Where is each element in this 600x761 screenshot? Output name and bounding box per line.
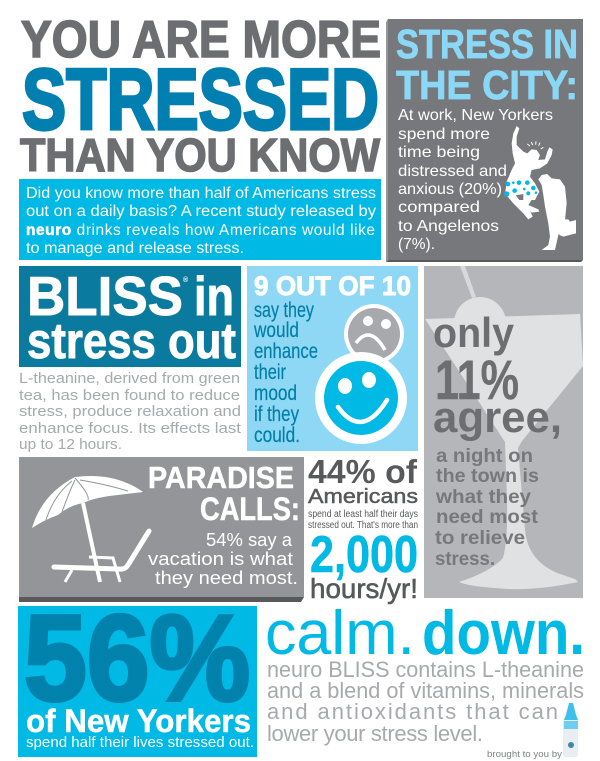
text: vacation (148, 530, 298, 588)
text: 44 percent of americans: 2,000 (310, 526, 418, 584)
panel: intro: Did you know more than half of Americans stress (26, 185, 376, 202)
heading: 9 out of 10: 9 OUT OF 10 (254, 271, 411, 301)
text: only 11% agree (433, 309, 562, 442)
text: city body: distressed and (398, 163, 507, 180)
text: city body: anxious (20%) (398, 181, 502, 198)
text: 44 percent of americans: 44% of (308, 453, 418, 490)
text: l-theanine: up to 12 hours. (19, 436, 122, 453)
text: 44 percent of americans: stressed out. That's more than (308, 520, 418, 531)
text: would enhance mood: say they (254, 299, 314, 322)
text: l-theanine: L-theanine, derived from green (19, 370, 240, 387)
text: would enhance mood: enhance (254, 340, 318, 363)
panel: 56 percent: spend half their lives stressed out. (26, 734, 254, 751)
text: neuro bliss: lower your stress level. (267, 721, 483, 746)
text: l-theanine: tea, has been found to reduce (19, 387, 240, 404)
heading: paradise calls: PARADISE (148, 460, 294, 495)
text: would enhance mood (253, 299, 318, 447)
text: neuro bliss (267, 657, 584, 746)
icon: bottle (563, 703, 578, 757)
title: STRESSED (22, 52, 379, 148)
title (20, 11, 381, 181)
text: night on the town: stress. (435, 548, 495, 570)
text: only 11% agree: agree, (433, 393, 562, 442)
panel: intro: to manage and release stress. (26, 240, 244, 257)
panel: 9 out of 10 (247, 266, 418, 451)
icon: sad face (344, 304, 404, 364)
text: night on the town: the town is (436, 465, 539, 487)
text: only 11% agree: only (433, 309, 515, 356)
text: city body: to Angelenos (398, 218, 499, 235)
text: neuro bliss: and antioxidants that can (267, 699, 558, 724)
text: city body (398, 107, 553, 253)
heading: calm down: calm. (265, 599, 415, 668)
text: would enhance mood: would (253, 319, 299, 342)
text: neuro bliss: neuro BLISS contains L-theanine (267, 657, 584, 682)
text: 44 percent of americans (308, 453, 418, 604)
text: city body: compared (398, 199, 480, 216)
text: 44 percent of americans: spend at least half their days (308, 509, 418, 520)
text: brought to you by: brought to you by (487, 749, 563, 759)
text: 44 percent of americans: Americans (308, 486, 418, 508)
text: l-theanine (19, 370, 242, 453)
text: neuro bliss: and a blend of vitamins, minerals (267, 678, 584, 703)
heading: calm down (265, 599, 585, 668)
text: vacation: vacation is what (148, 549, 293, 569)
panel: bliss: ® (183, 276, 189, 284)
heading: paradise calls (148, 460, 300, 527)
text: night on the town: what they (435, 486, 531, 508)
text: vacation: 54% say a (206, 530, 293, 550)
text: only 11% agree: 11% (435, 348, 519, 411)
heading: calm down: down. (422, 599, 585, 668)
panel: bliss: BLISS (27, 265, 183, 327)
text: night on the town (435, 445, 539, 570)
text: would enhance mood: if they (254, 403, 299, 426)
title: YOU ARE MORE (21, 11, 381, 69)
text: city body: (7%). (398, 236, 435, 253)
text: city body: time being (398, 144, 480, 161)
text: would enhance mood: mood (254, 382, 297, 405)
text: l-theanine: enhance focus. Its effects last (19, 420, 242, 437)
heading: paradise calls: CALLS: (200, 491, 300, 527)
heading: stress in the city (396, 21, 578, 108)
icon: beach umbrella and chair (32, 476, 149, 582)
panel: intro: neuro drinks reveals how Americans would like (26, 222, 375, 239)
text: would enhance mood: could. (254, 424, 300, 447)
text: city body: spend more (398, 126, 490, 143)
text: night on the town: need most (436, 506, 539, 528)
icon: martini glass (425, 266, 583, 589)
panel: paradise calls (19, 457, 304, 602)
panel: intro (19, 179, 381, 260)
panel: bliss (19, 265, 241, 369)
panel: stress in the city (386, 19, 583, 262)
panel: martini (424, 266, 583, 598)
panel: 56 percent: of New Yorkers (26, 703, 251, 739)
panel: 56 percent: 56% (24, 590, 250, 726)
panel: bliss: stress out (27, 313, 236, 369)
heading: stress in the city: THE CITY: (396, 62, 578, 108)
text: vacation: they need most. (155, 568, 298, 588)
icon: jumping man (504, 126, 553, 219)
panel: intro: out on a daily basis? A recent study released by (26, 203, 376, 220)
panel: bliss: in (194, 265, 234, 327)
title: THAN YOU KNOW (20, 129, 381, 181)
text: l-theanine: stress, produce relaxation and (19, 403, 241, 420)
icon: happy face (315, 352, 407, 444)
text: 44 percent of americans: hours/yr! (310, 573, 418, 604)
text: night on the town: to relieve (435, 527, 525, 549)
icon: businessman with briefcase (538, 174, 576, 250)
text: city body: At work, New Yorkers (398, 107, 553, 124)
text: night on the town: a night on (436, 445, 533, 467)
text: would enhance mood: their (254, 361, 286, 384)
